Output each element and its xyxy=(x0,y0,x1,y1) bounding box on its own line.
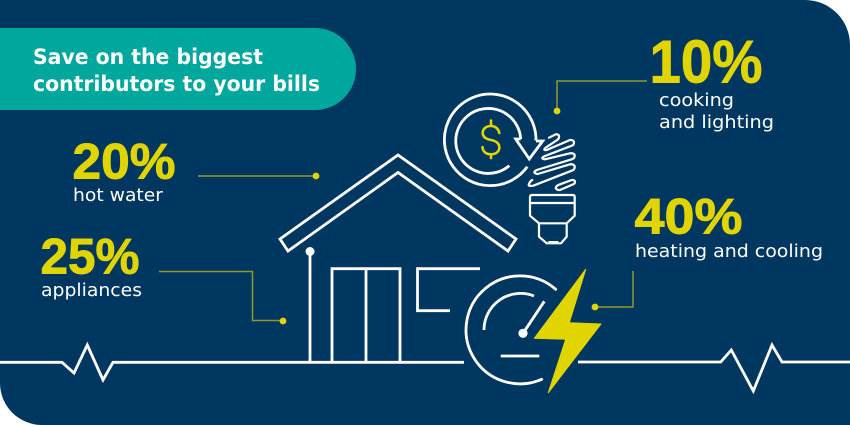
heading banner: contributors to your bills xyxy=(33,72,320,96)
icon: savings arrow circle xyxy=(444,94,543,186)
stat: 10% cooking and lighting: and lighting xyxy=(659,112,774,133)
stat: 10% cooking and lighting: 10% xyxy=(650,28,762,96)
inner arrow arc xyxy=(456,108,521,173)
door xyxy=(332,269,400,362)
bulb base xyxy=(530,195,575,243)
lamp post xyxy=(306,247,314,362)
outer arrow arc xyxy=(444,94,536,186)
icon: light bulb xyxy=(529,134,575,243)
gauge outer arc xyxy=(466,276,556,384)
gauge bar xyxy=(501,355,539,357)
bulb tip xyxy=(548,241,558,243)
arrow head xyxy=(516,139,543,159)
gauge inner arc xyxy=(484,293,534,330)
house icon xyxy=(280,155,516,362)
leader line: cooking and lighting xyxy=(554,81,647,114)
stat: 10% cooking and lighting xyxy=(650,28,774,133)
stat: 25% appliances: 25% xyxy=(40,228,140,284)
window xyxy=(418,269,480,311)
stat: 10% cooking and lighting: cooking xyxy=(659,90,734,111)
icon: dollar sign xyxy=(482,120,499,158)
bulb coil lower loop xyxy=(556,180,575,190)
leader line: heating and cooling xyxy=(592,271,633,310)
leader line: hot water xyxy=(198,173,319,179)
stat: 40% heating and cooling: 40% xyxy=(634,188,742,244)
stat: 40% heating and cooling: heating and cooling xyxy=(635,241,823,262)
heading banner: Save on the biggest xyxy=(33,45,263,69)
gauge needle xyxy=(518,301,544,338)
leader line: appliances xyxy=(159,272,286,324)
gauge icon xyxy=(466,276,556,384)
stat: 40% heating and cooling xyxy=(634,188,823,262)
stat: 20% hot water: 20% xyxy=(72,134,176,190)
ground line with pulse, right xyxy=(578,345,850,391)
stat: 20% hot water: hot water xyxy=(73,185,164,206)
icon: lightning bolt xyxy=(534,269,601,393)
stat: 25% appliances: appliances xyxy=(41,280,142,301)
bulb coil xyxy=(529,134,575,186)
ground line with pulse, left xyxy=(0,345,464,380)
heading banner xyxy=(0,28,356,110)
roof xyxy=(280,155,516,251)
